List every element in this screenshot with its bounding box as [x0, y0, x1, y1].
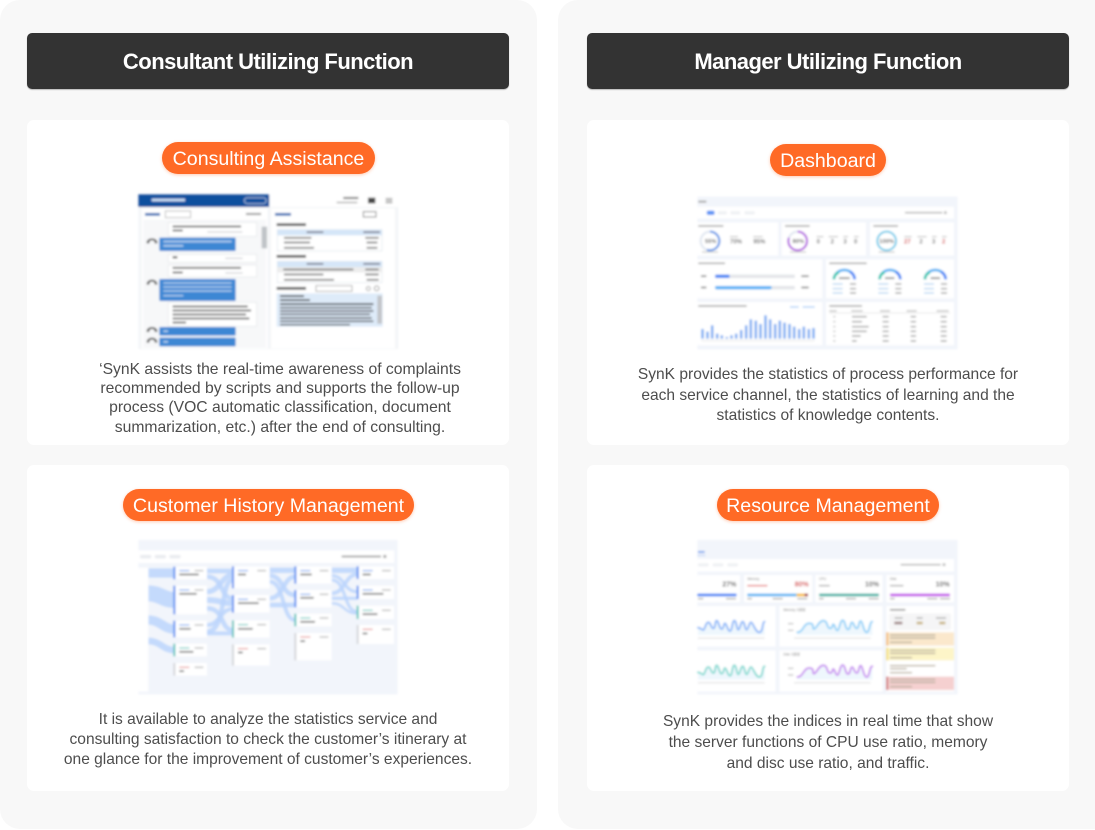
screenshot: statistics dashboard: 3: [843, 239, 847, 245]
description: consulting assistance: ‘SynK assists the real-time awareness of complaints: [99, 361, 461, 378]
screenshot: statistics dashboard: 2: [831, 239, 835, 245]
description: consulting assistance: process (VOC automatic classification, document: [109, 399, 451, 416]
description: resource management: and disc use ratio, and traffic.: [727, 755, 929, 772]
info pane: [271, 208, 395, 348]
table: [829, 312, 950, 314]
screenshot: server resource monitor: Memory 사용량: [783, 607, 805, 612]
pill heading: resource management: [717, 489, 939, 521]
pill heading: consulting assistance: [162, 142, 375, 174]
screenshot: statistics dashboard: [697, 197, 958, 349]
card: dashboard: [587, 120, 1069, 445]
screenshot: server resource monitor: Disk: [890, 577, 897, 581]
description: dashboard: [638, 366, 1018, 424]
screenshot: statistics dashboard: 95%: [753, 239, 766, 245]
description: customer history management: consulting satisfaction to check the customer’s itinerary at: [70, 731, 466, 748]
alert panel: [890, 609, 905, 611]
stat bars: [697, 594, 737, 596]
nodes: [138, 566, 394, 692]
pill heading: dashboard: [770, 144, 886, 176]
wave area fills: [698, 620, 872, 680]
stat values: 10%: [865, 581, 880, 588]
card: resource management: [587, 465, 1069, 791]
pill heading: customer history management: Customer History Management: [133, 495, 404, 517]
panel: manager utilizing function: [558, 0, 1095, 829]
screenshot: statistics dashboard: 0: [817, 239, 821, 245]
description: resource management: [663, 713, 994, 772]
card: customer history management: [27, 465, 509, 791]
description: resource management: the server functions of CPU use ratio, memory: [669, 734, 987, 751]
pill heading: resource management: Resource Management: [726, 495, 930, 517]
screenshot: statistics dashboard: 2: [942, 239, 946, 245]
flows: [148, 570, 357, 650]
heading: manager: [587, 33, 1069, 89]
screenshot: statistics dashboard: 3: [932, 239, 936, 245]
screenshot: server resource monitor: Memory: [747, 577, 760, 581]
stat values: [722, 581, 950, 588]
ring gauges: [701, 232, 896, 250]
screenshot: statistics dashboard: 80%: [793, 239, 804, 245]
screenshot: customer journey flow chart: [138, 540, 398, 694]
description: customer history management: [64, 711, 472, 768]
stat values: 80%: [795, 581, 809, 588]
screenshot: server resource monitor: [696, 540, 958, 694]
node labels: [179, 570, 373, 626]
screenshot: server resource monitor: Disk 사용량: [783, 651, 800, 656]
progress bars: [715, 275, 795, 278]
card: consulting assistance: [27, 120, 509, 445]
pill heading: dashboard: Dashboard: [780, 150, 876, 172]
heading: manager: Manager Utilizing Function: [694, 49, 962, 74]
heading: consultant: [27, 33, 509, 89]
screenshot: statistics dashboard: 2: [919, 239, 923, 245]
semi gauges: [834, 270, 946, 279]
description: consulting assistance: summarization, etc.) after the end of consulting.: [115, 419, 445, 436]
description: resource management: SynK provides the indices in real time that show: [663, 713, 993, 730]
screenshot: statistics dashboard: 100%: [879, 239, 894, 245]
wave lines: [698, 620, 872, 677]
screenshot: consulting chat screen: [136, 192, 398, 348]
description: consulting assistance: [99, 361, 461, 436]
panel: consultant utilizing function: [0, 0, 537, 829]
description: dashboard: SynK provides the statistics of process performance for: [638, 366, 1018, 383]
stat values: 10%: [936, 581, 950, 588]
pill heading: consulting assistance: Consulting Assistance: [173, 148, 364, 170]
screenshot: server resource monitor: CPU: [819, 577, 827, 581]
heading: consultant: Consultant Utilizing Function: [123, 49, 413, 74]
screenshot: statistics dashboard: 27: [904, 239, 911, 245]
description: dashboard: statistics of knowledge contents.: [717, 407, 939, 424]
description: consulting assistance: recommended by scripts and supports the follow-up: [100, 380, 460, 397]
screenshot: statistics dashboard: 55%: [705, 239, 716, 245]
screenshot: statistics dashboard: 0: [854, 239, 858, 245]
description: dashboard: each service channel, the statistics of learning and the: [641, 386, 1015, 404]
description: customer history management: It is available to analyze the statistics service and: [99, 711, 437, 728]
screenshot: statistics dashboard: 70%: [730, 239, 743, 245]
chat pane: [142, 208, 268, 348]
bar chart: [701, 315, 815, 339]
description: customer history management: one glance for the improvement of customer’s experiences.: [64, 751, 472, 768]
stat values: 27%: [722, 581, 737, 588]
pill heading: customer history management: [123, 489, 414, 521]
